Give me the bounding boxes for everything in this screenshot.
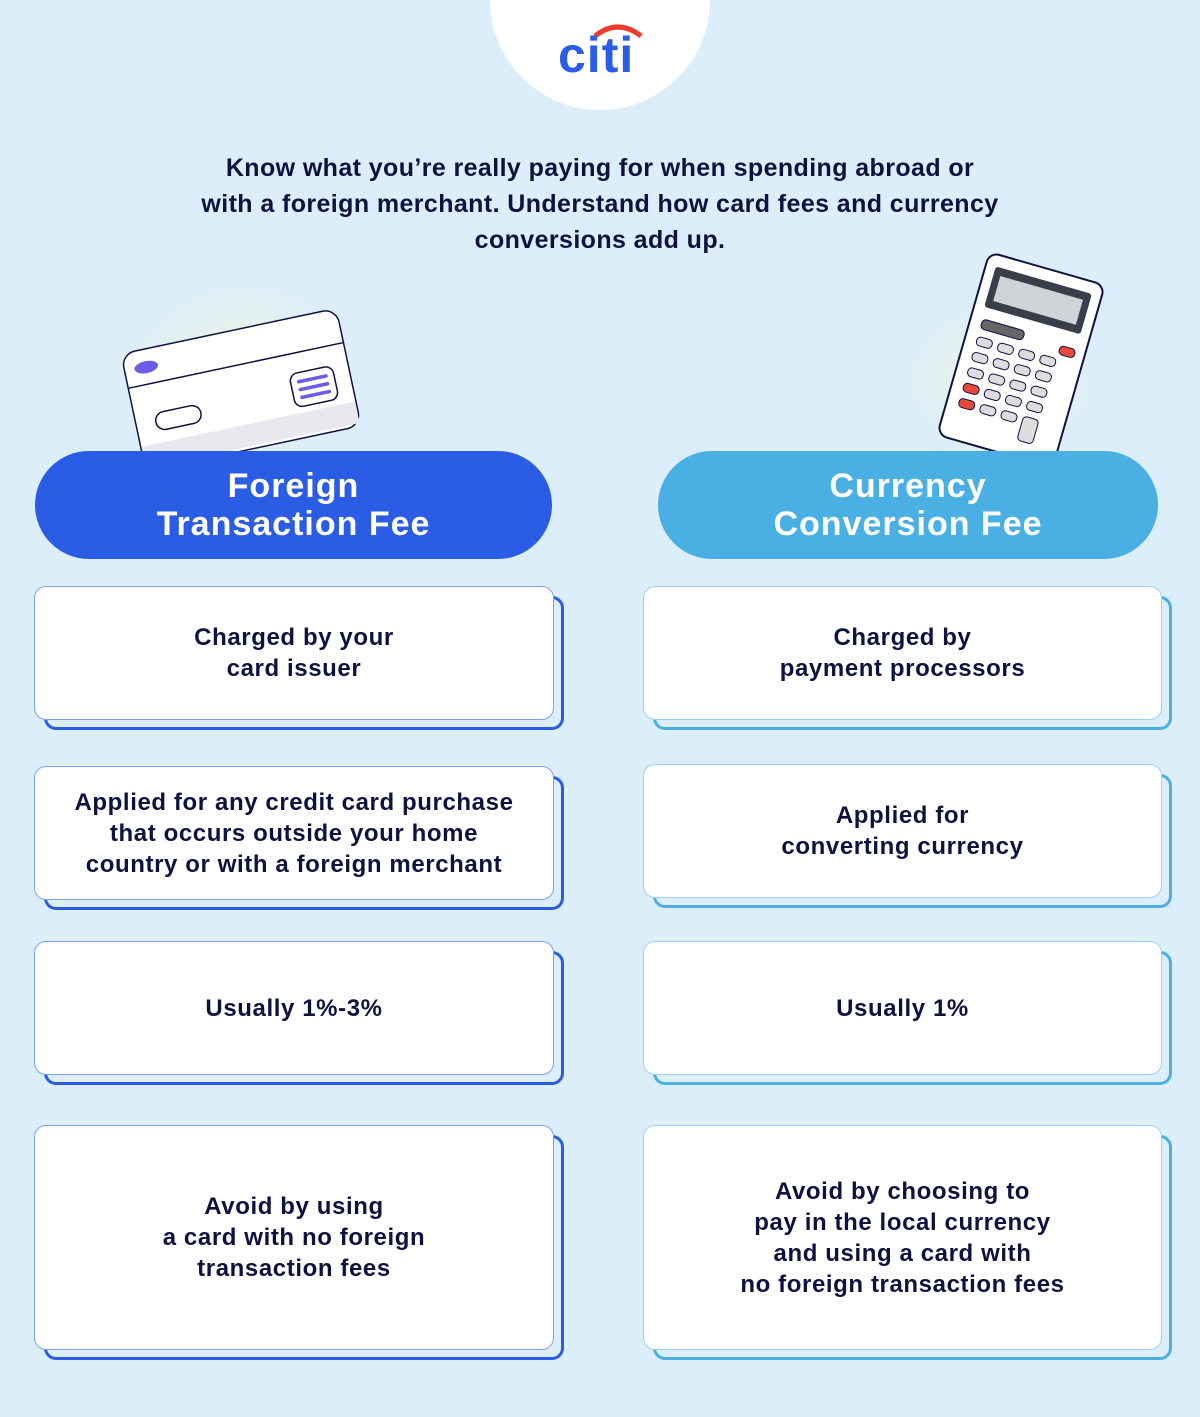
- panel: right row 1: Charged by: [833, 624, 972, 651]
- heading: Foreign Transaction Fee: [35, 451, 552, 559]
- heading: Foreign Transaction Fee: Transaction Fee: [157, 505, 430, 543]
- panel: right row 1: payment processors: [780, 655, 1025, 682]
- panel: right row 4: pay in the local currency: [754, 1208, 1051, 1236]
- heading: Currency Conversion Fee: [658, 451, 1158, 559]
- intro text: Know what you’re really paying for when spending abroad or: [226, 154, 974, 182]
- icon: credit card: [122, 310, 360, 451]
- intro text: conversions add up.: [475, 226, 725, 254]
- panel: left row 4: Avoid by using: [204, 1193, 384, 1220]
- intro text: [201, 154, 999, 254]
- panel: right row 4: Avoid by choosing to: [775, 1178, 1030, 1204]
- panel: left row 4: transaction fees: [197, 1255, 391, 1282]
- panel: right row 4: and using a card with: [774, 1240, 1031, 1266]
- panel: left row 1: card issuer: [227, 655, 361, 682]
- logo circle: [490, 0, 710, 110]
- heading: Currency Conversion Fee: Currency: [829, 467, 987, 505]
- panel: left row 1: Charged by your: [194, 624, 394, 651]
- panel: left row 1: [34, 586, 564, 730]
- intro text: with a foreign merchant. Understand how card fees and currency: [201, 190, 999, 218]
- panel: left row 2: country or with a foreign merchant: [86, 850, 502, 878]
- panel: right row 2: [643, 764, 1172, 908]
- panel: right row 2: Applied for: [836, 802, 969, 829]
- panel: left row 2: [34, 766, 564, 910]
- panel: right row 4: [643, 1125, 1172, 1360]
- heading: Currency Conversion Fee: Conversion Fee: [773, 505, 1043, 543]
- panel: right row 3: [643, 941, 1172, 1085]
- panel: left row 2: that occurs outside your home: [110, 820, 478, 846]
- heading: Foreign Transaction Fee: Foreign: [228, 467, 359, 505]
- panel: right row 1: [643, 586, 1172, 730]
- panel: right row 2: converting currency: [781, 833, 1024, 860]
- panel: left row 2: Applied for any credit card purchase: [74, 788, 514, 816]
- icon: calculator: [936, 254, 1104, 451]
- panel: left row 3: [34, 941, 564, 1085]
- panel: right row 3: Usually 1%: [836, 994, 969, 1022]
- panel: right row 4: no foreign transaction fees: [740, 1270, 1065, 1298]
- panel: left row 4: a card with no foreign: [163, 1224, 425, 1251]
- panel: left row 3: Usually 1%-3%: [205, 994, 383, 1022]
- panel: left row 4: [34, 1125, 564, 1360]
